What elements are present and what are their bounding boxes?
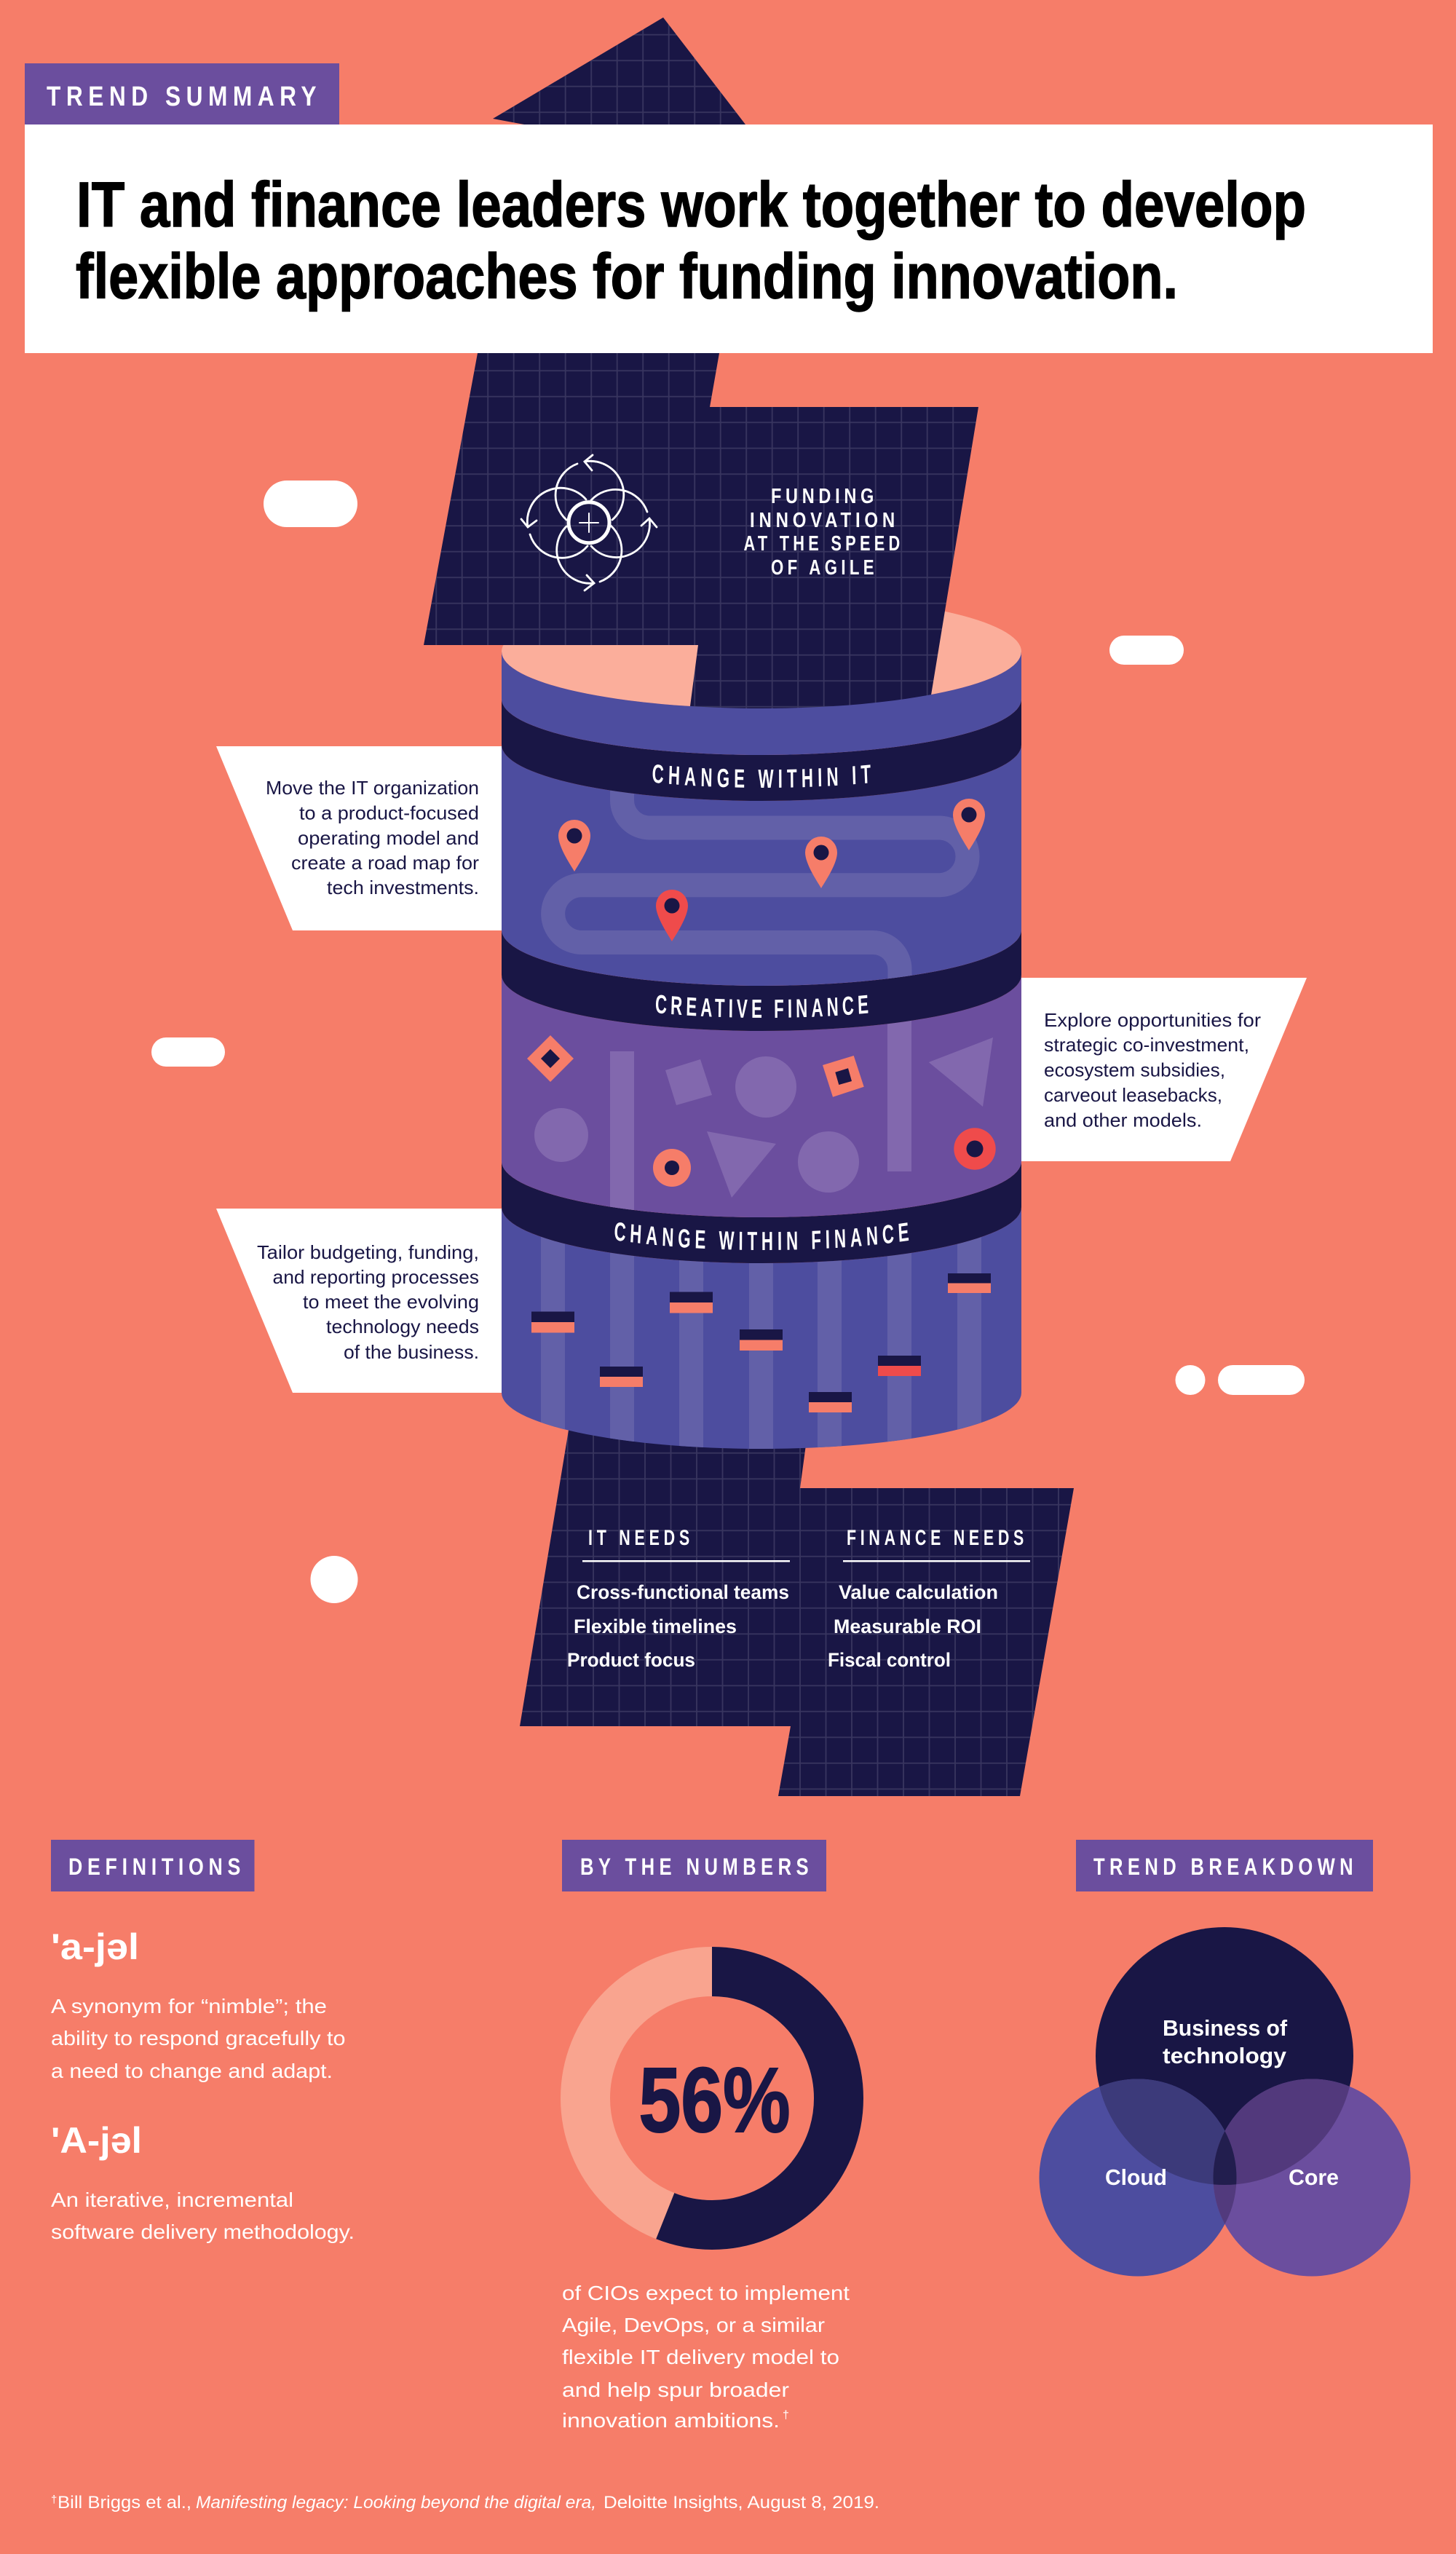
term: capital agile: 'A-jəl <box>51 2120 142 2161</box>
panel: funding innovation shape <box>424 17 978 717</box>
band: change within finance: CHANGE WITHIN FINANCE <box>614 1222 909 1250</box>
venn label: business of technology: technology <box>1163 2043 1287 2068</box>
finance needs list <box>828 1581 998 1671</box>
text: CIOs statistic: flexible IT delivery model to <box>562 2346 839 2368</box>
heading: IT needs: IT NEEDS <box>588 1526 694 1550</box>
text: CIOs statistic: innovation ambitions. <box>562 2409 780 2432</box>
IT needs list: Product focus <box>567 1649 695 1671</box>
icon: map pin <box>558 820 590 871</box>
icon: map pin <box>953 799 985 850</box>
cylinder section: change within finance <box>502 1201 1021 1456</box>
callout: IT organization: operating model and <box>298 827 479 849</box>
footnote: Manifesting legacy: Looking beyond the digital era, <box>196 2493 596 2513</box>
callout: finance processes: of the business. <box>344 1341 479 1363</box>
band: creative finance: CREATIVE FINANCE <box>655 995 868 1018</box>
panel: definitions <box>51 1840 355 2243</box>
callout: finance processes: technology needs <box>326 1316 479 1337</box>
definition: methodology <box>51 2189 355 2243</box>
icon: agile flower with arrows <box>521 455 657 590</box>
venn label: cloud: Cloud <box>1105 2164 1167 2190</box>
callout: finance processes: and reporting processes <box>272 1266 479 1288</box>
icon: red map pin <box>656 890 688 941</box>
icon: orange ring <box>653 1149 691 1187</box>
tag: by the numbers: BY THE NUMBERS <box>580 1854 813 1880</box>
title box <box>25 124 1433 353</box>
cylinder top ring <box>502 652 1021 755</box>
heading: finance needs: FINANCE NEEDS <box>847 1526 1028 1550</box>
text: funding innovation at the speed of agile: AT THE SPEED <box>744 532 904 556</box>
text: funding innovation at the speed of agile: OF AGILE <box>771 556 878 580</box>
finance needs list: Measurable ROI <box>834 1616 981 1637</box>
callout: finance processes <box>216 1209 502 1393</box>
callout: IT organization: create a road map for <box>291 852 479 874</box>
tag: trend summary: TREND SUMMARY <box>47 82 322 112</box>
road path <box>541 791 980 978</box>
band: change within IT <box>502 700 1021 801</box>
text: CIOs statistic <box>562 2282 850 2432</box>
callout: creative finance: and other models. <box>1044 1110 1202 1131</box>
chart: donut 56 percent <box>585 1972 839 2225</box>
IT needs list <box>567 1581 789 1671</box>
cylinder section: change within IT road map <box>502 745 1021 1005</box>
text: funding innovation at the speed of agile: FUNDING <box>771 485 878 508</box>
tag: by the numbers <box>562 1840 826 1891</box>
definition: methodology: An iterative, incremental <box>51 2189 293 2211</box>
shape: translucent bars and polygons <box>534 1021 993 1210</box>
band: creative finance <box>502 930 1021 1031</box>
chart: donut 56 percent: 56% <box>639 2049 791 2151</box>
icon: red ring <box>954 1128 996 1170</box>
band: change within finance <box>502 1162 1021 1263</box>
footnote: Bill Briggs et al., <box>58 2493 191 2513</box>
venn label: business of technology <box>1163 2015 1288 2068</box>
band: change within IT: CHANGE WITHIN IT <box>652 764 871 788</box>
text: CIOs statistic: † <box>783 2409 789 2421</box>
IT needs list: Flexible timelines <box>574 1616 737 1637</box>
callout: IT organization: Move the IT organization <box>266 777 479 799</box>
callout: creative finance: ecosystem subsidies, <box>1044 1059 1225 1080</box>
tag: trend breakdown <box>1076 1840 1373 1891</box>
IT needs list: Cross-functional teams <box>577 1581 789 1603</box>
chart: stripe markers <box>531 1273 991 1412</box>
panel: by the numbers <box>562 1840 850 2432</box>
footnote <box>51 2493 879 2513</box>
chart: vertical stripes <box>541 1236 981 1449</box>
cylinder section: creative finance shapes <box>502 975 1021 1233</box>
callout: finance processes: Tailor budgeting, funding, <box>257 1241 479 1263</box>
callout: IT organization: tech investments. <box>327 877 479 898</box>
callout: creative finance: carveout leasebacks, <box>1044 1084 1222 1106</box>
finance needs list: Value calculation <box>839 1581 998 1603</box>
definition: methodology: software delivery methodology. <box>51 2221 355 2243</box>
definition: nimble: a need to change and adapt. <box>51 2060 333 2082</box>
definition: nimble <box>51 1995 345 2082</box>
term: lowercase agile: 'a-jəl <box>51 1926 139 1967</box>
icon: orange square <box>823 1056 864 1097</box>
text: CIOs statistic: of CIOs expect to implement <box>562 2282 850 2304</box>
venn label: business of technology: Business of <box>1163 2015 1288 2041</box>
callout: finance processes: to meet the evolving <box>303 1291 479 1313</box>
panel: needs lists on grid shape <box>520 1412 1074 1796</box>
text: CIOs statistic: Agile, DevOps, or a similar <box>562 2314 825 2336</box>
callout: creative finance: Explore opportunities for <box>1044 1009 1261 1031</box>
tag: definitions <box>51 1840 255 1891</box>
callout: IT organization: to a product-focused <box>299 802 479 824</box>
panel: trend breakdown <box>1040 1840 1411 2276</box>
footnote: Deloitte Insights, August 8, 2019. <box>604 2493 879 2513</box>
title <box>76 170 1306 312</box>
tag: definitions: DEFINITIONS <box>68 1854 245 1880</box>
callout: creative finance <box>1021 978 1307 1161</box>
icon: orange diamond <box>527 1035 574 1082</box>
title: flexible approaches for funding innovation. <box>76 242 1178 312</box>
text: CIOs statistic: and help spur broader <box>562 2379 789 2401</box>
footnote: † <box>51 2494 57 2506</box>
callout: creative finance: strategic co-investment, <box>1044 1034 1249 1056</box>
icon: map pin <box>805 837 837 888</box>
venn label: core: Core <box>1289 2164 1339 2190</box>
definition: nimble: ability to respond gracefully to <box>51 2027 345 2049</box>
chart: venn diagram <box>1040 1927 1411 2276</box>
cylinder top opening <box>502 595 1021 708</box>
finance needs list: Fiscal control <box>828 1649 951 1671</box>
tag: trend summary <box>25 63 339 124</box>
decorative white pills <box>151 481 1305 1603</box>
tag: trend breakdown: TREND BREAKDOWN <box>1093 1854 1358 1880</box>
text: funding innovation at the speed of agile: INNOVATION <box>750 509 899 532</box>
definition: nimble: A synonym for “nimble”; the <box>51 1995 327 2017</box>
text: funding innovation at the speed of agile <box>744 485 904 580</box>
callout: IT organization <box>216 746 502 930</box>
